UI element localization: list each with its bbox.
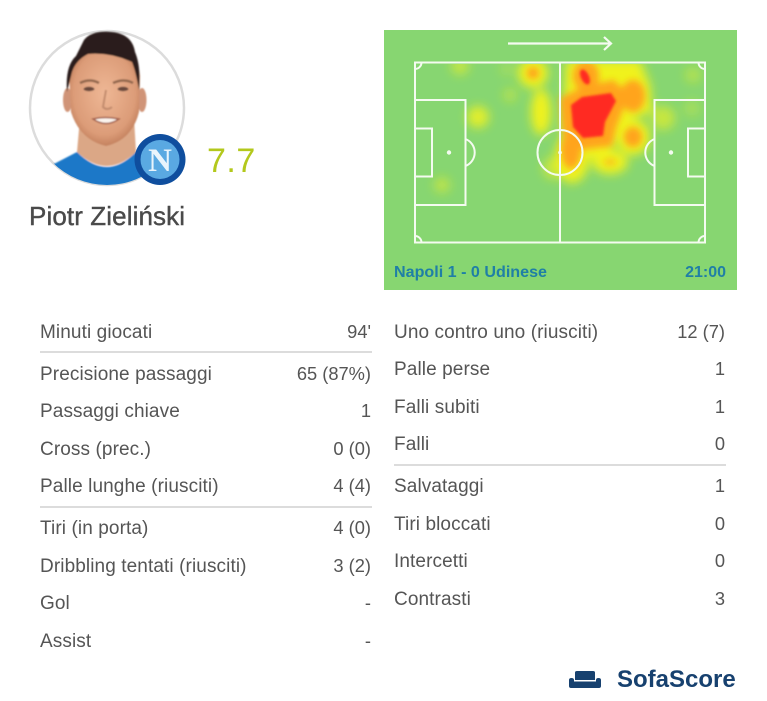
- SofaScore logo: [569, 666, 736, 693]
- value: key passes: 1: [361, 400, 371, 421]
- value: tackles: 3: [715, 588, 725, 609]
- stat: fouls suffered: Falli subiti: [394, 397, 480, 418]
- value: one on one: 12 (7): [677, 321, 725, 342]
- value: clearances: 1: [715, 475, 725, 496]
- stat: clearances: Salvataggi: [394, 476, 484, 497]
- value: fouls suffered: 1: [715, 396, 725, 417]
- stat: dribbles: Dribbling tentati (riusciti): [40, 556, 247, 577]
- stat: minutes played: Minuti giocati: [40, 322, 152, 343]
- stat: shots: Tiri (in porta): [40, 518, 148, 539]
- panel: heatmap pitch: [384, 30, 737, 290]
- stat: long balls: Palle lunghe (riusciti): [40, 476, 219, 497]
- value: pass accuracy: 65 (87%): [297, 363, 371, 384]
- value: dribbles: 3 (2): [333, 555, 371, 576]
- value: long balls: 4 (4): [333, 475, 371, 496]
- value: goals: -: [365, 592, 371, 613]
- player portrait: [28, 30, 186, 186]
- team badge: Napoli: [134, 134, 186, 185]
- stat: interceptions: Intercetti: [394, 551, 468, 572]
- team badge: Napoli: N: [148, 143, 172, 179]
- panel: left statistics: [40, 321, 372, 652]
- player rating: 7.7: [207, 142, 256, 180]
- value: possession lost: 1: [715, 358, 725, 379]
- icon: sofa: [569, 671, 601, 688]
- value: interceptions: 0: [715, 550, 725, 571]
- stat: possession lost: Palle perse: [394, 359, 490, 380]
- stat: assists: Assist: [40, 631, 91, 652]
- stat: fouls: Falli: [394, 434, 429, 455]
- value: fouls: 0: [715, 433, 725, 454]
- stat: tackles: Contrasti: [394, 589, 471, 610]
- value: blocked shots: 0: [715, 513, 725, 534]
- match time: 21:00: [685, 264, 726, 281]
- stat: crosses: Cross (prec.): [40, 439, 151, 460]
- stat: goals: Gol: [40, 593, 70, 614]
- value: shots: 4 (0): [333, 517, 371, 538]
- pitch lines: [415, 62, 705, 242]
- wordmark: SofaScore: [617, 666, 736, 693]
- value: crosses: 0 (0): [333, 438, 371, 459]
- panel: right statistics: [394, 321, 726, 610]
- stat: pass accuracy: Precisione passaggi: [40, 364, 212, 385]
- heat map: [434, 57, 701, 193]
- stat: blocked shots: Tiri bloccati: [394, 514, 491, 535]
- attack direction arrow: [508, 37, 611, 50]
- player name: Piotr Zieliński: [29, 201, 185, 231]
- stat: one on one: Uno contro uno (riusciti): [394, 322, 598, 343]
- stat: key passes: Passaggi chiave: [40, 401, 180, 422]
- match score: Napoli 1 - 0 Udinese: [394, 264, 547, 281]
- value: minutes played: 94': [347, 321, 371, 342]
- value: assists: -: [365, 630, 371, 651]
